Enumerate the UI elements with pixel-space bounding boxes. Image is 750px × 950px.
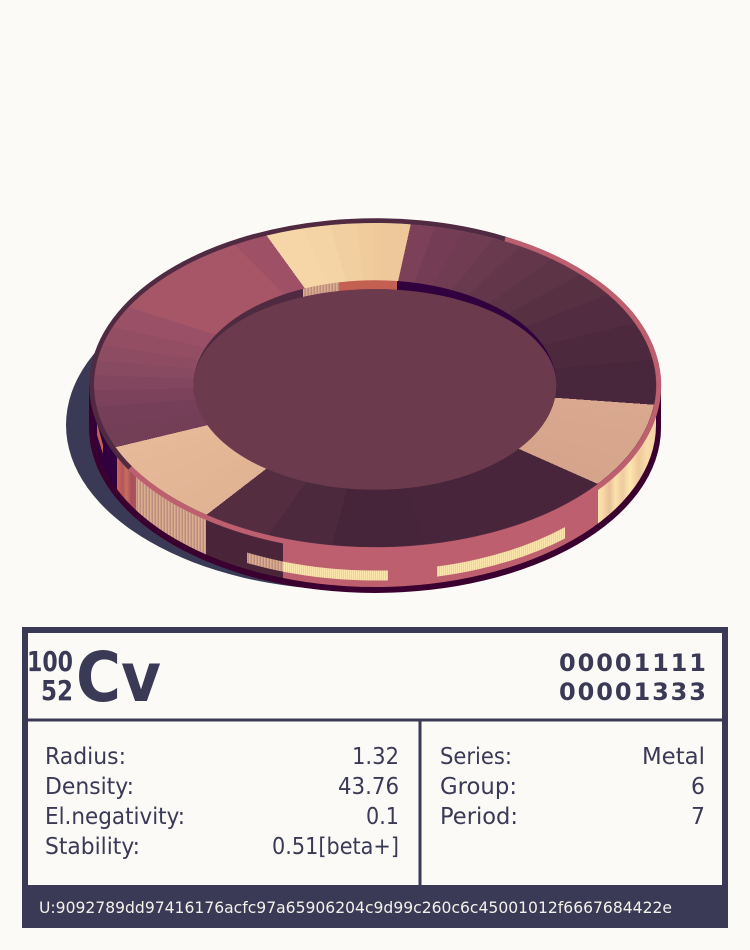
card border <box>25 630 725 925</box>
ring sectors <box>94 223 656 547</box>
left properties: 1.32 <box>352 742 399 770</box>
left properties: Stability: <box>45 832 140 860</box>
element card <box>22 627 728 928</box>
column divider <box>418 720 422 886</box>
right properties: Period: <box>440 802 518 830</box>
element symbol: Cv <box>76 638 161 718</box>
isometric ring chart <box>66 218 662 593</box>
wall stripe: tan <box>247 552 283 572</box>
right properties <box>440 742 705 830</box>
atomic number: 52 <box>41 674 73 707</box>
right properties: 7 <box>691 802 705 830</box>
left properties <box>45 742 399 860</box>
right properties: Series: <box>440 742 512 770</box>
left properties: 0.1 <box>366 802 399 830</box>
binary row 1: 00001111 <box>559 649 706 677</box>
wall stripe: cream right <box>437 527 565 577</box>
binary row 2: 00001333 <box>559 678 706 706</box>
left properties: Density: <box>45 772 134 800</box>
mass number: 100 <box>27 645 73 678</box>
header divider <box>28 718 722 722</box>
rim: pink arc <box>130 239 659 550</box>
right properties: 6 <box>691 772 705 800</box>
outer wall bands <box>94 416 656 587</box>
wall stripe: cream left <box>283 562 388 580</box>
inner wall bands <box>190 275 559 395</box>
right properties: Group: <box>440 772 517 800</box>
footer bar <box>22 885 728 928</box>
well floor <box>194 289 556 490</box>
left properties: El.negativity: <box>45 802 185 830</box>
left properties: 0.51[beta+] <box>272 832 399 860</box>
centre well <box>194 280 556 490</box>
drop shadow <box>66 260 638 590</box>
wall base <box>89 385 661 593</box>
left properties: Radius: <box>45 742 126 770</box>
right properties: Metal <box>642 742 705 770</box>
chart base: shadow, outer wall and rim <box>66 218 662 593</box>
rim: dark arc <box>92 221 505 468</box>
left properties: 43.76 <box>338 772 399 800</box>
footer hash: U:9092789dd97416176acfc97a65906204c9d99c260c6c45001012f6667684422e <box>39 898 672 917</box>
